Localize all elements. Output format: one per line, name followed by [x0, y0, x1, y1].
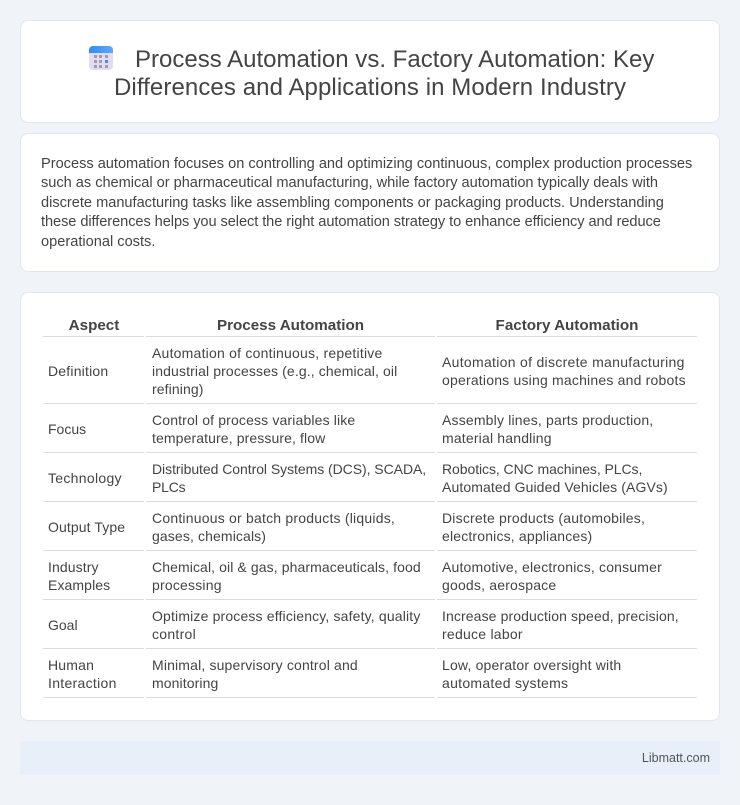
table panel [20, 292, 720, 721]
comparison table [43, 317, 697, 698]
row: output type: gases, chemicals) [152, 528, 266, 544]
column headers [69, 317, 638, 334]
row: industry examples: goods, aerospace [442, 577, 556, 593]
row: human interaction: monitoring [152, 675, 218, 691]
intro text: Process automation focuses on controlling and optimizing continuous, complex production processes [41, 156, 692, 172]
row: focus: Assembly lines, parts production, [442, 412, 653, 428]
row: technology: Automated Guided Vehicles (AGVs) [442, 479, 668, 495]
column headers: Aspect [69, 317, 119, 334]
row: technology: Robotics, CNC machines, PLCs, [442, 461, 642, 477]
header panel [20, 20, 720, 123]
row: definition: industrial processes (e.g., chemical, oil [152, 363, 397, 379]
intro text: operational costs. [41, 234, 155, 250]
row: industry examples: Automotive, electronics, consumer [442, 559, 662, 575]
row: goal: Goal [48, 617, 78, 633]
row: definition: refining) [152, 381, 203, 397]
row: human interaction: automated systems [442, 675, 568, 691]
column headers: Factory Automation [496, 317, 638, 334]
row: industry examples: processing [152, 577, 222, 593]
title [114, 46, 654, 101]
intro panel [20, 133, 720, 272]
row: definition: Automation of discrete manufacturing [442, 354, 685, 370]
row: output type: Discrete products (automobiles, [442, 510, 645, 526]
row: definition: operations using machines and robots [442, 372, 686, 388]
row: technology: Technology [48, 470, 122, 486]
row: definition: Definition [48, 363, 108, 379]
row: goal: Optimize process efficiency, safety, quality [152, 608, 420, 624]
row: industry examples: Chemical, oil & gas, pharmaceuticals, food [152, 559, 421, 575]
footer text: Libmatt.com [642, 751, 710, 765]
row: industry examples: Industry [48, 559, 99, 575]
row: focus [48, 412, 653, 446]
row: focus: Control of process variables like [152, 412, 355, 428]
intro text: such as chemical or pharmaceutical manufacturing, while factory automation typically deals with [41, 174, 658, 190]
row: definition [48, 345, 686, 397]
row: output type: Output Type [48, 519, 125, 535]
row: human interaction: Interaction [48, 675, 117, 691]
intro text [41, 156, 692, 250]
row: goal: reduce labor [442, 626, 523, 642]
row: human interaction [48, 657, 621, 691]
row: human interaction: Minimal, supervisory control and [152, 657, 358, 673]
row: goal [48, 608, 679, 642]
row: technology [48, 461, 668, 495]
row: output type: Continuous or batch products (liquids, [152, 510, 395, 526]
row: industry examples: Examples [48, 577, 110, 593]
icon: calendar grid [89, 46, 113, 70]
row: goal: Increase production speed, precision, [442, 608, 679, 624]
intro text: these differences helps you select the right automation strategy to enhance efficiency and reduce [41, 214, 661, 230]
row: goal: control [152, 626, 196, 642]
row: human interaction: Human [48, 657, 94, 673]
column headers: Process Automation [217, 317, 364, 334]
row: focus: material handling [442, 430, 552, 446]
row: human interaction: Low, operator oversight with [442, 657, 621, 673]
row: focus: Focus [48, 421, 86, 437]
row: output type [48, 510, 645, 544]
row: output type: electronics, appliances) [442, 528, 592, 544]
row: focus: temperature, pressure, flow [152, 430, 325, 446]
footer bar [20, 741, 720, 775]
title: Process Automation vs. Factory Automation: Key [135, 46, 654, 73]
row: technology: Distributed Control Systems (DCS), SCADA, [152, 461, 426, 477]
row: definition: Automation of continuous, repetitive [152, 345, 382, 361]
intro text: discrete manufacturing tasks like assembling components or packaging products. Understanding [41, 195, 664, 211]
row: technology: PLCs [152, 479, 185, 495]
title: Differences and Applications in Modern Industry [114, 74, 626, 101]
row: industry examples [48, 559, 662, 593]
